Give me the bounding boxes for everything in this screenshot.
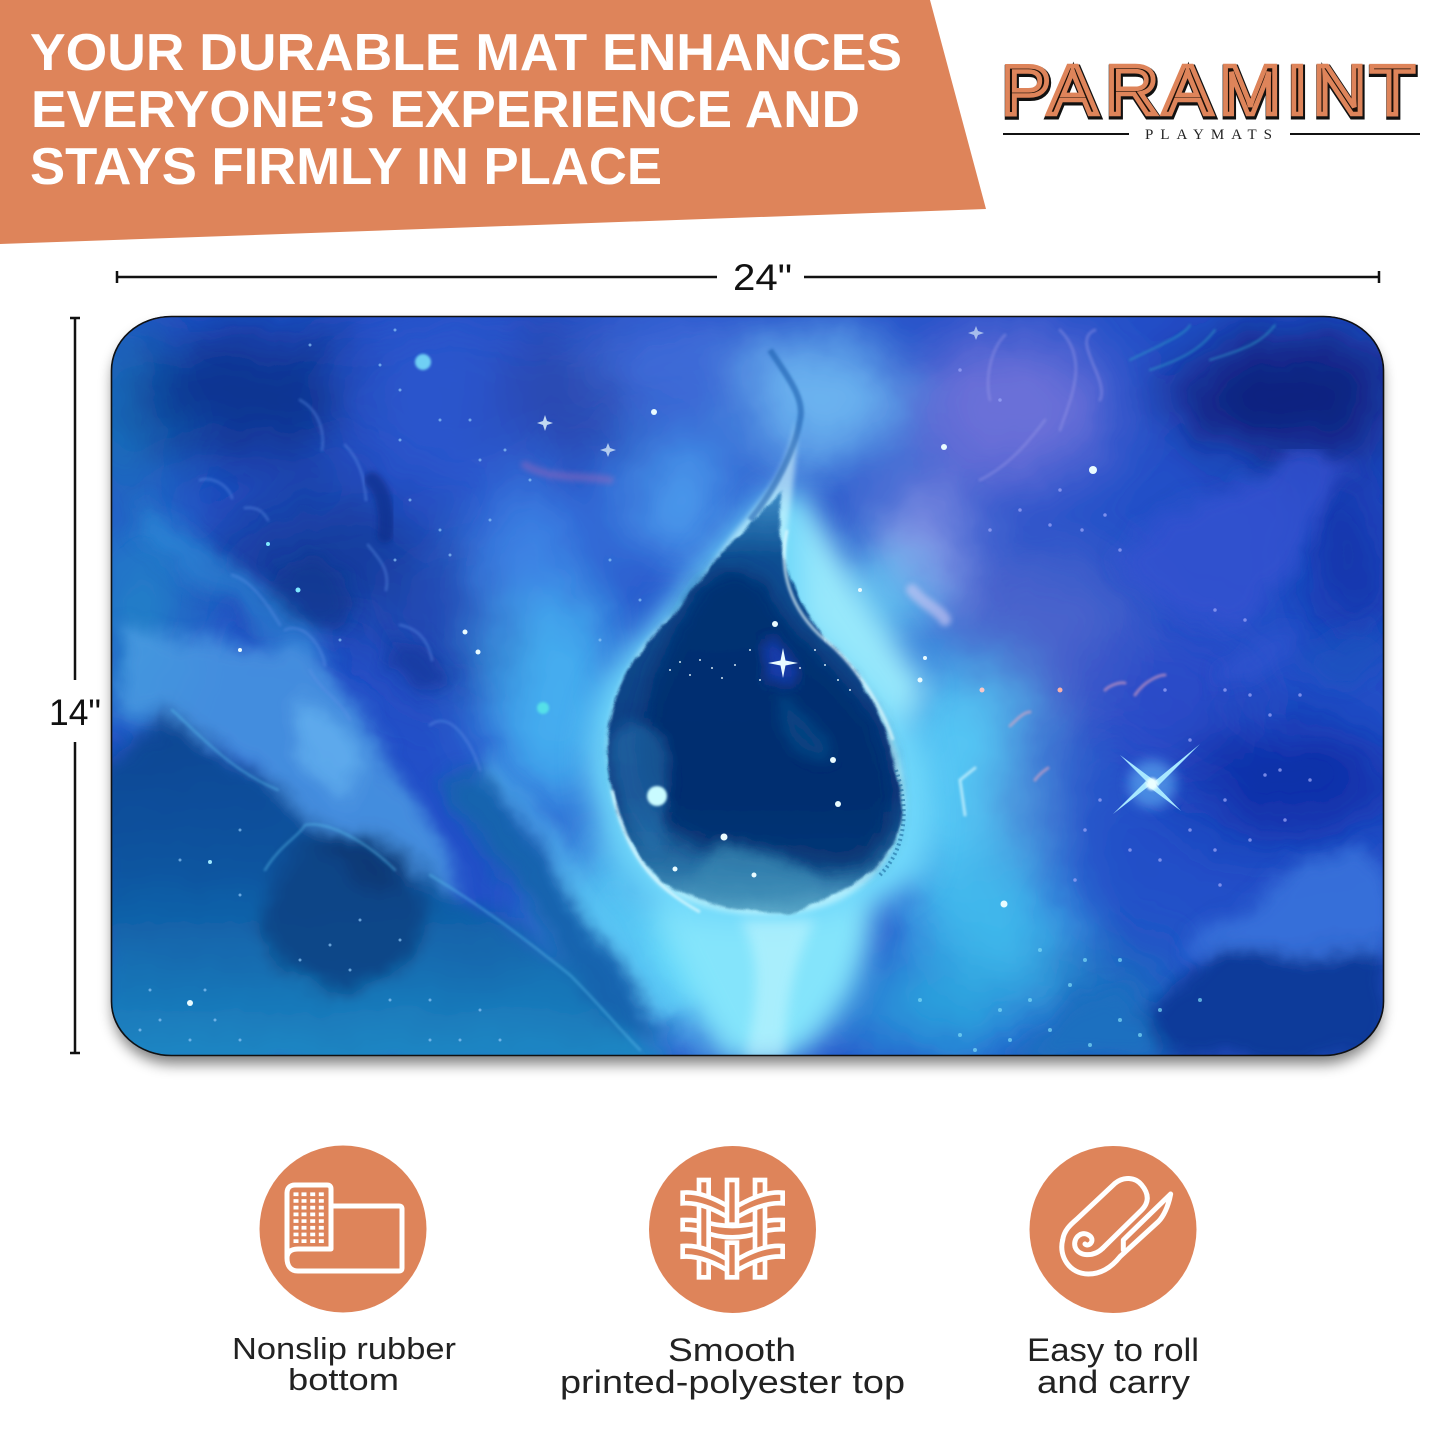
width dimension: 24 inches: 24" [733,257,792,298]
large star with rays [1113,744,1200,814]
feature: nonslip rubber bottom [232,1146,456,1397]
width dimension: 24 inches [117,257,1379,298]
bright glow around drop [587,480,932,1060]
label: Smooth [668,1332,796,1368]
height dimension: 14 inches [49,318,101,1053]
label [1027,1332,1199,1400]
icon: woven fabric [649,1146,816,1313]
title banner [0,0,986,244]
label: printed-polyester top [560,1364,905,1400]
label: Nonslip rubber [232,1331,456,1366]
nebula shapes [100,449,1390,1070]
logo: Paramint Playmats: PARAMINT [1001,52,1415,130]
swirls and streaks [172,325,1275,1050]
title: STAYS FIRMLY IN PLACE [30,138,662,196]
feature: smooth printed polyester top [560,1146,905,1400]
label: Easy to roll [1027,1332,1199,1368]
logo: Paramint Playmats: PLAYMATS [1145,127,1272,143]
title: EVERYONE’S EXPERIENCE AND [31,81,860,139]
teardrop void [607,350,905,915]
label: bottom [288,1362,399,1397]
logo: Paramint Playmats: PARAMINT [1002,53,1416,131]
label: and carry [1037,1364,1190,1400]
icon: rolled mat [1030,1146,1196,1313]
label [560,1332,905,1400]
height dimension: 14 inches: 14" [49,692,101,733]
label [232,1331,456,1397]
feature: easy to roll and carry [1027,1146,1199,1400]
title: YOUR DURABLE MAT ENHANCES [30,24,902,82]
light stream below drop [740,920,815,1060]
icon: mat with rubber underside [260,1146,426,1312]
star dust [140,330,1310,1050]
bright stars [187,326,1097,1006]
title [30,24,902,196]
playmat with nebula artwork [60,270,1440,1100]
painted colour fields [111,316,1384,1055]
